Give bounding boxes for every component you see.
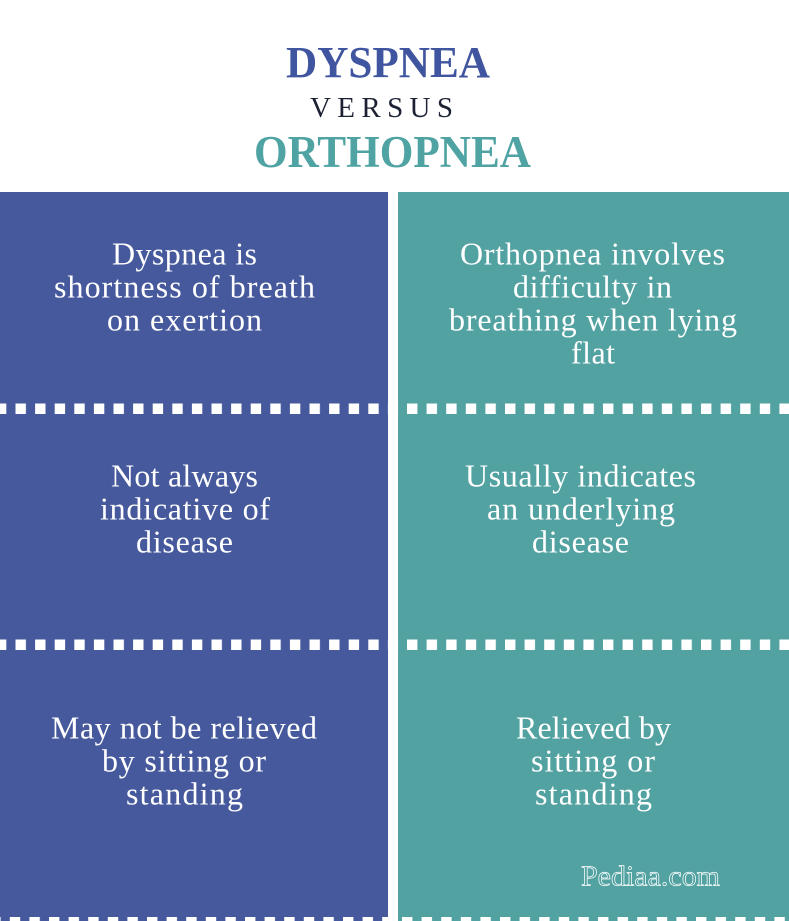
text: dyspnea definition: shortness of breath <box>54 268 315 304</box>
text: dyspnea relief: standing <box>126 776 243 812</box>
text: orthopnea definition: difficulty in <box>513 268 672 304</box>
text: dyspnea relief <box>51 710 317 812</box>
title: Orthopnea: ORTHOPNEA <box>254 127 531 177</box>
text: dyspnea definition: Dyspnea is <box>112 236 257 272</box>
text: dyspnea relief: May not be relieved <box>51 710 317 746</box>
text: orthopnea disease indication: disease <box>532 524 629 560</box>
text: orthopnea disease indication <box>465 458 696 560</box>
text: orthopnea definition <box>449 236 737 370</box>
divider: left row 1 <box>0 404 388 414</box>
text: orthopnea disease indication: an underlying <box>487 490 675 526</box>
text: orthopnea disease indication: Usually indicates <box>465 458 696 494</box>
text: orthopnea relief <box>516 710 671 812</box>
divider: right row 2 <box>398 640 789 650</box>
watermark: Pediaa.com: Pediaa.com <box>581 860 720 892</box>
text: dyspnea definition: on exertion <box>107 302 262 338</box>
text: dyspnea disease indication: Not always <box>111 458 258 494</box>
panel: dyspnea column <box>0 192 388 921</box>
subtitle: versus: VERSUS <box>310 92 453 124</box>
text: dyspnea disease indication: indicative of <box>100 490 270 526</box>
text: dyspnea definition <box>54 236 315 338</box>
divider: right row 1 <box>398 404 789 414</box>
text: dyspnea disease indication <box>100 458 270 560</box>
text: orthopnea relief: sitting or <box>531 742 655 778</box>
text: orthopnea definition: breathing when lying <box>449 302 737 338</box>
divider: right bottom <box>398 917 789 921</box>
title block <box>254 38 531 177</box>
divider: left bottom <box>0 917 388 921</box>
text: orthopnea definition: Orthopnea involves <box>460 236 725 272</box>
text: dyspnea disease indication: disease <box>136 524 233 560</box>
text: orthopnea definition: flat <box>571 334 615 370</box>
panel: orthopnea column <box>398 192 789 921</box>
text: dyspnea relief: by sitting or <box>102 742 266 778</box>
text: orthopnea relief: standing <box>535 776 652 812</box>
title: Dyspnea: DYSPNEA <box>286 38 490 87</box>
divider: left row 2 <box>0 640 388 650</box>
text: orthopnea relief: Relieved by <box>516 710 671 746</box>
